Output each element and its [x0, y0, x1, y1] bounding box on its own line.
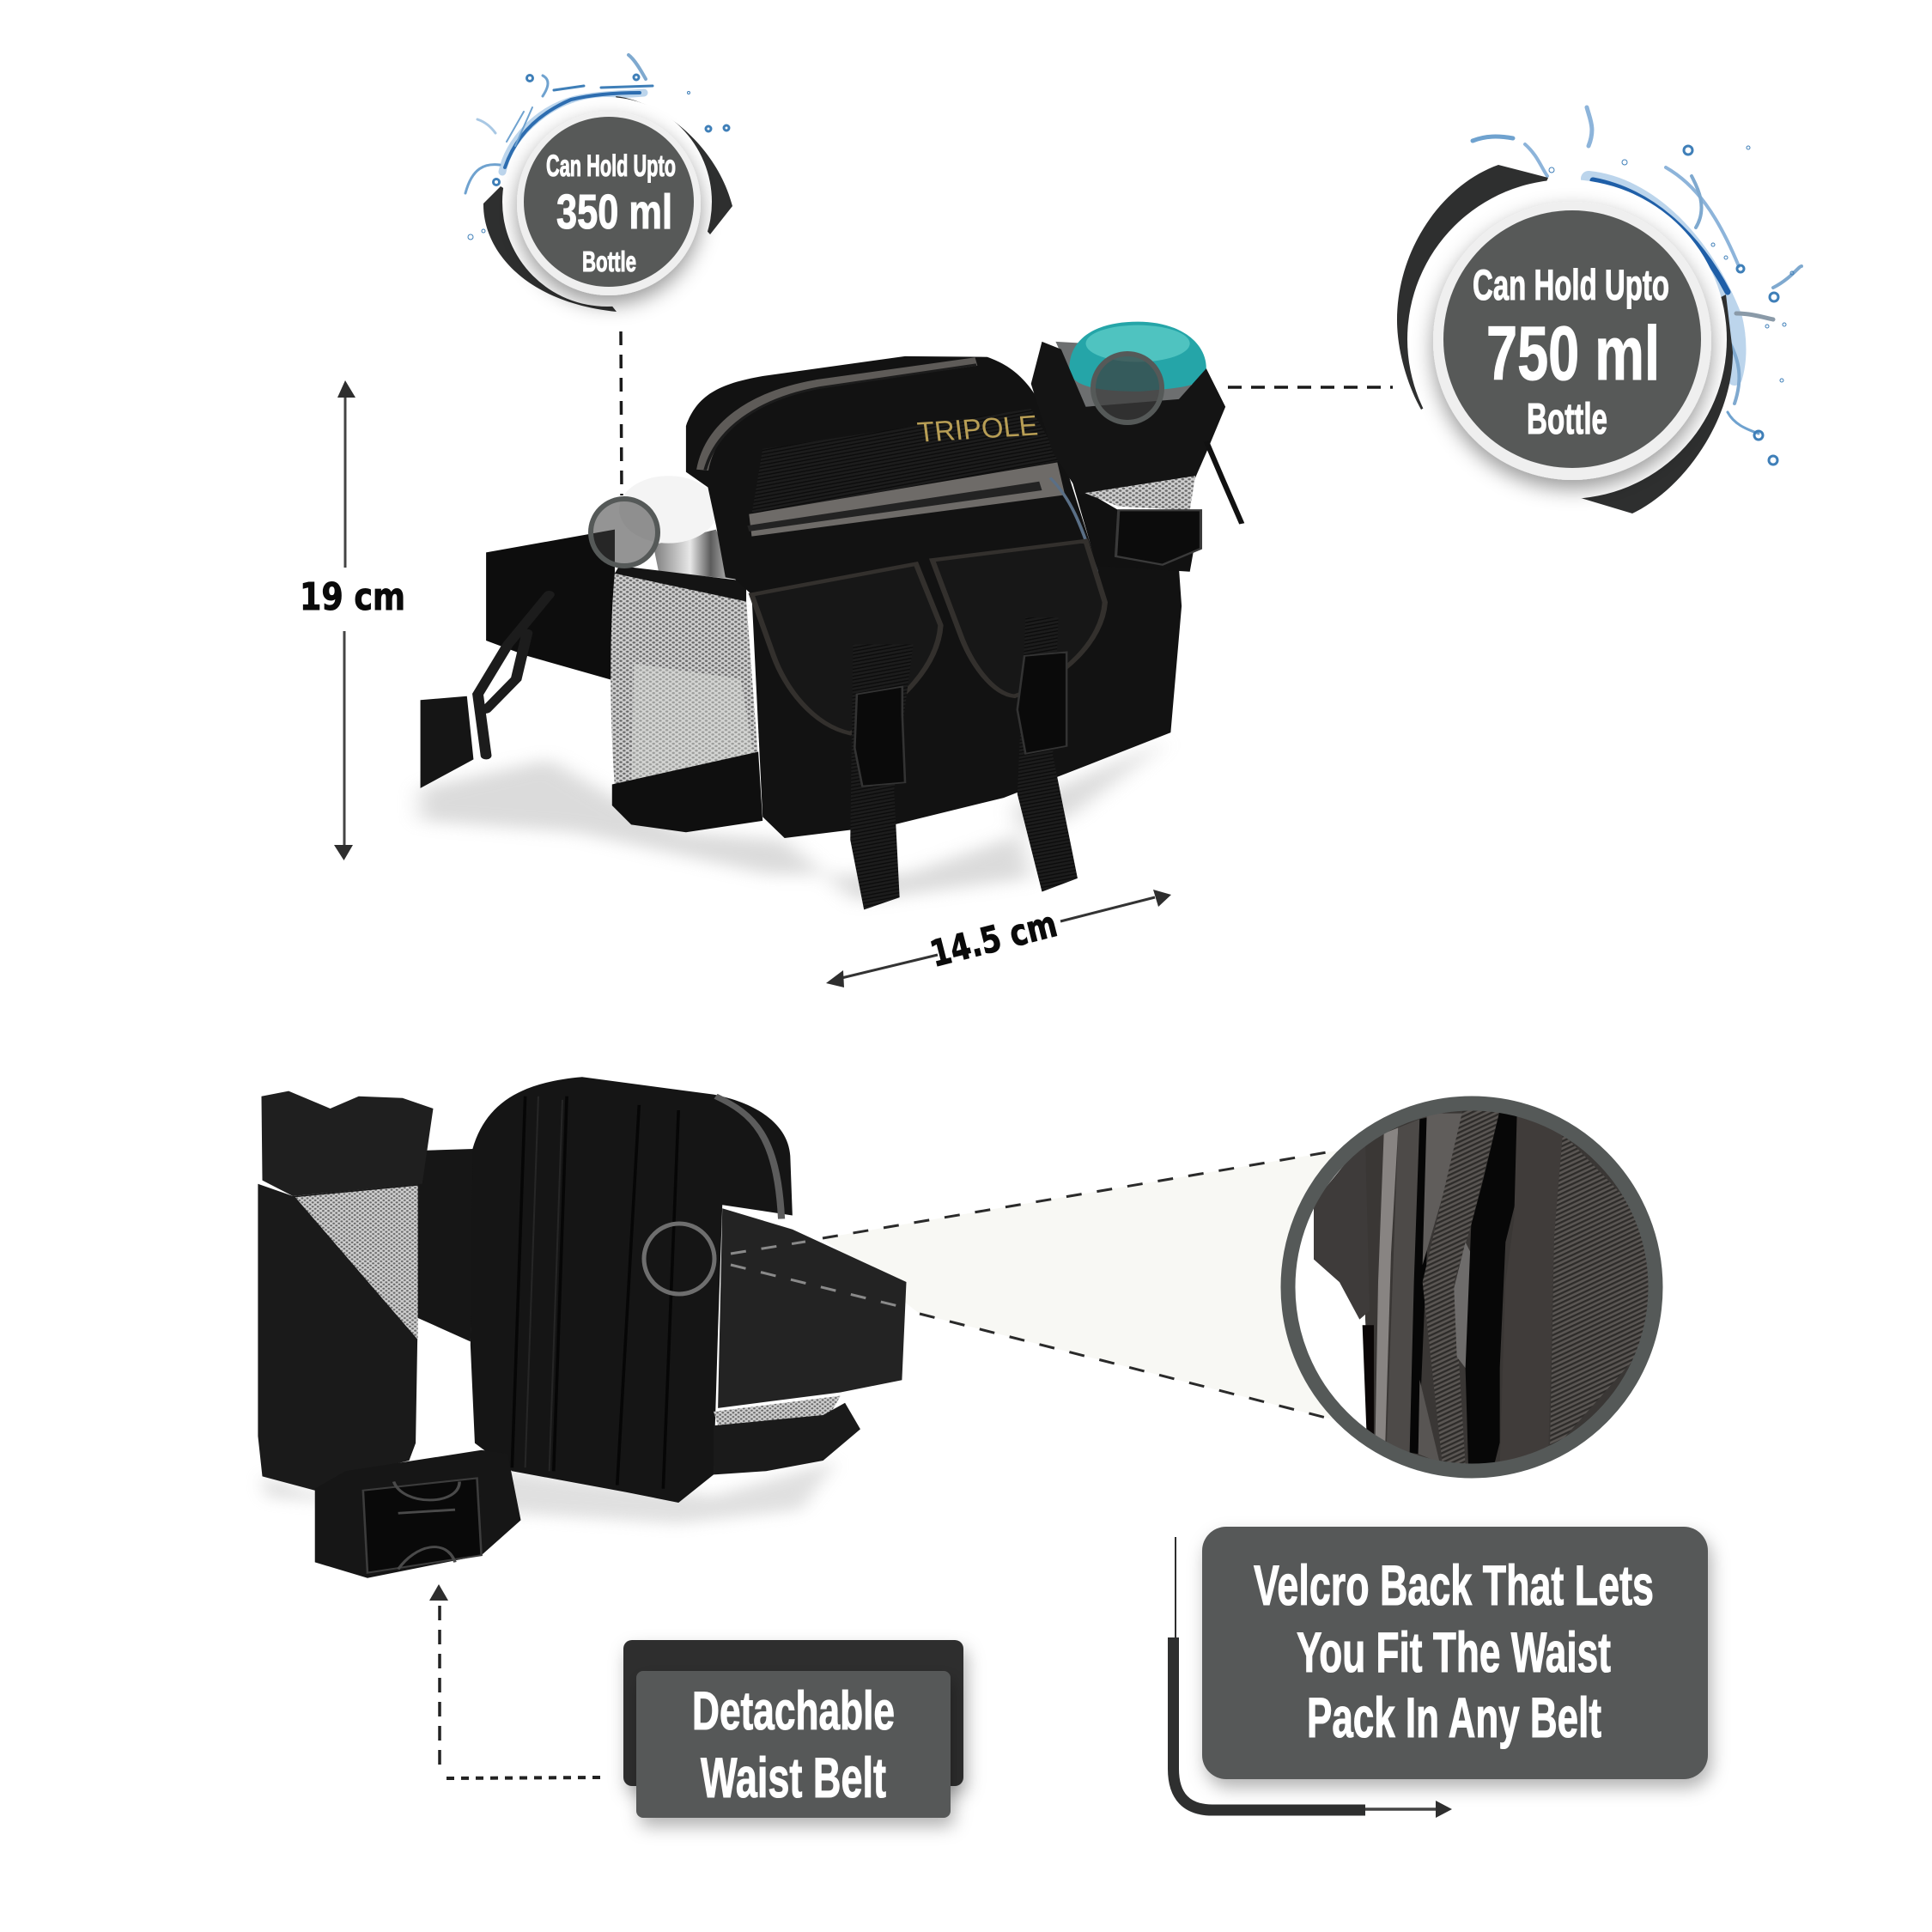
marker circle on large bottle [1093, 354, 1162, 422]
main bag body [686, 356, 1182, 838]
magnifier beam [823, 1151, 1337, 1419]
straps and buckles [850, 645, 914, 909]
top zippers [702, 361, 976, 470]
label: velcro back [1202, 1527, 1708, 1779]
marker circle on small bottle [591, 499, 658, 566]
dashed connector 350 ml [621, 331, 622, 495]
dark swoosh large [1397, 165, 1733, 513]
detachable buckle [315, 1450, 521, 1578]
badge text small: 350 ml [556, 185, 672, 240]
grey dashes over flap [731, 1242, 902, 1307]
side clip [478, 594, 549, 756]
bottle holder side [258, 1091, 433, 1491]
ground shadow back [263, 1461, 836, 1523]
height dimension 19 cm [300, 380, 405, 860]
small bottle in mesh pocket [611, 476, 762, 832]
width dimension 14.5 cm: 14.5 cm [926, 902, 1061, 975]
label: velcro back: Pack In Any Belt [1307, 1686, 1601, 1749]
badge text small: Can Hold Upto [546, 149, 676, 183]
badge text large: Bottle [1527, 394, 1607, 443]
water splash small [465, 55, 729, 240]
dark swoosh small [483, 96, 732, 312]
badge text large: 750 ml [1486, 310, 1660, 396]
logo: TRIPOLE [915, 409, 1040, 448]
flap pockets [751, 564, 940, 733]
water splash large [1473, 107, 1801, 465]
label: detachable waist belt: Waist Belt [701, 1746, 886, 1809]
width dimension 14.5 cm [826, 890, 1171, 987]
350 ml bottle callout badge [465, 55, 732, 312]
main bag back [471, 1077, 793, 1503]
badge text small [546, 149, 676, 277]
marker circle on back panel [644, 1224, 714, 1294]
belt behind [416, 1149, 477, 1341]
750 ml bottle callout badge [1397, 107, 1801, 513]
photo: front of waist pack with bottles [421, 322, 1242, 909]
height dimension 19 cm: 19 cm [300, 575, 405, 619]
badge text large [1473, 261, 1669, 443]
zoomed velcro detail circle [1288, 1097, 1672, 1483]
badge text large: Can Hold Upto [1473, 261, 1669, 309]
zip pull cord [1050, 477, 1097, 572]
photo: back of waist pack with velcro flap [258, 1077, 907, 1578]
dashed connector 750 ml [1228, 386, 1393, 389]
label: detachable waist belt [623, 1640, 963, 1818]
L-shaped arrow under velcro label [1173, 1537, 1452, 1818]
lower mesh and base [714, 1396, 841, 1425]
badge text small: Bottle [582, 246, 636, 277]
ground shadow [421, 740, 1168, 902]
velcro flap [718, 1208, 907, 1408]
dashed arrow to buckle [429, 1584, 602, 1778]
label: velcro back: Velcro Back That Lets [1254, 1553, 1654, 1617]
label: detachable waist belt: Detachable [692, 1681, 895, 1741]
label: velcro back: You Fit The Waist [1297, 1620, 1611, 1684]
waist belt [486, 530, 615, 681]
grey zip band [749, 462, 1065, 537]
large bottle holder [1031, 322, 1242, 572]
